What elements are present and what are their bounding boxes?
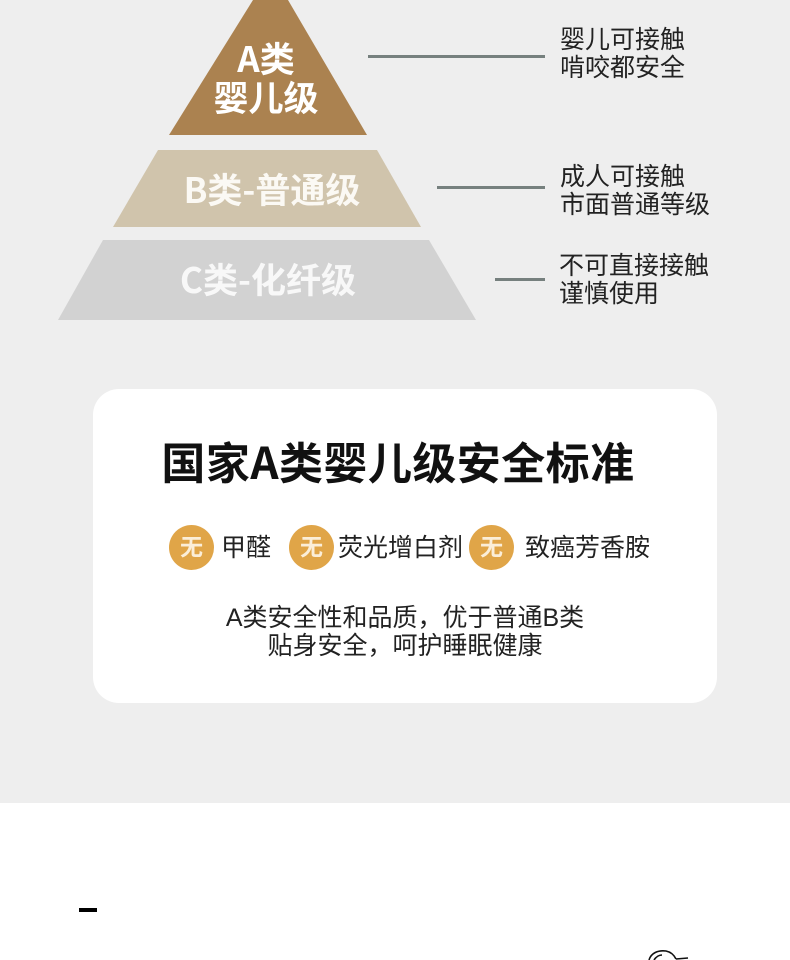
description A — [560, 26, 685, 82]
pyramid tier A — [169, 0, 367, 135]
icon: no aromatic amine: 无 — [480, 534, 503, 560]
icon: no aromatic amine — [469, 525, 514, 570]
dash mark — [79, 908, 97, 912]
card body text: 贴身安全，呵护睡眠健康 — [267, 632, 542, 660]
item: fluorescent agent: 荧光增白剂 — [338, 534, 463, 562]
pyramid tier C — [58, 240, 476, 320]
description C: 谨慎使用 — [559, 280, 659, 308]
description C — [559, 252, 709, 308]
icon: no formaldehyde: 无 — [180, 534, 203, 560]
card heading: 国家A类婴儿级安全标准 — [161, 428, 635, 492]
icon: cropped outline at bottom edge — [648, 950, 688, 960]
connector A — [368, 55, 545, 58]
description B — [560, 163, 710, 219]
tier A label: 婴儿级 — [213, 71, 318, 122]
icon: no fluorescent agent: 无 — [300, 534, 323, 560]
tier B label: B类-普通级 — [184, 163, 360, 214]
tier A label: A类 — [237, 32, 295, 83]
icon: no formaldehyde — [169, 525, 214, 570]
description A: 啃咬都安全 — [560, 54, 685, 82]
icon: no fluorescent agent — [289, 525, 334, 570]
tier C label: C类-化纤级 — [180, 253, 356, 304]
description B: 市面普通等级 — [560, 191, 710, 219]
connector B — [437, 186, 545, 189]
card body text: A类安全性和品质，优于普通B类 — [226, 604, 584, 632]
pyramid tier B — [113, 150, 421, 227]
description C: 不可直接接触 — [559, 252, 709, 280]
item: aromatic amine: 致癌芳香胺 — [525, 534, 650, 562]
connector C — [495, 278, 545, 281]
tier A label — [213, 32, 318, 122]
panel: safety standard card — [93, 389, 717, 703]
description B: 成人可接触 — [560, 163, 685, 191]
item: formaldehyde: 甲醛 — [221, 534, 271, 562]
card body text — [226, 604, 584, 660]
description A: 婴儿可接触 — [560, 26, 685, 54]
pyramid chart — [58, 0, 476, 320]
